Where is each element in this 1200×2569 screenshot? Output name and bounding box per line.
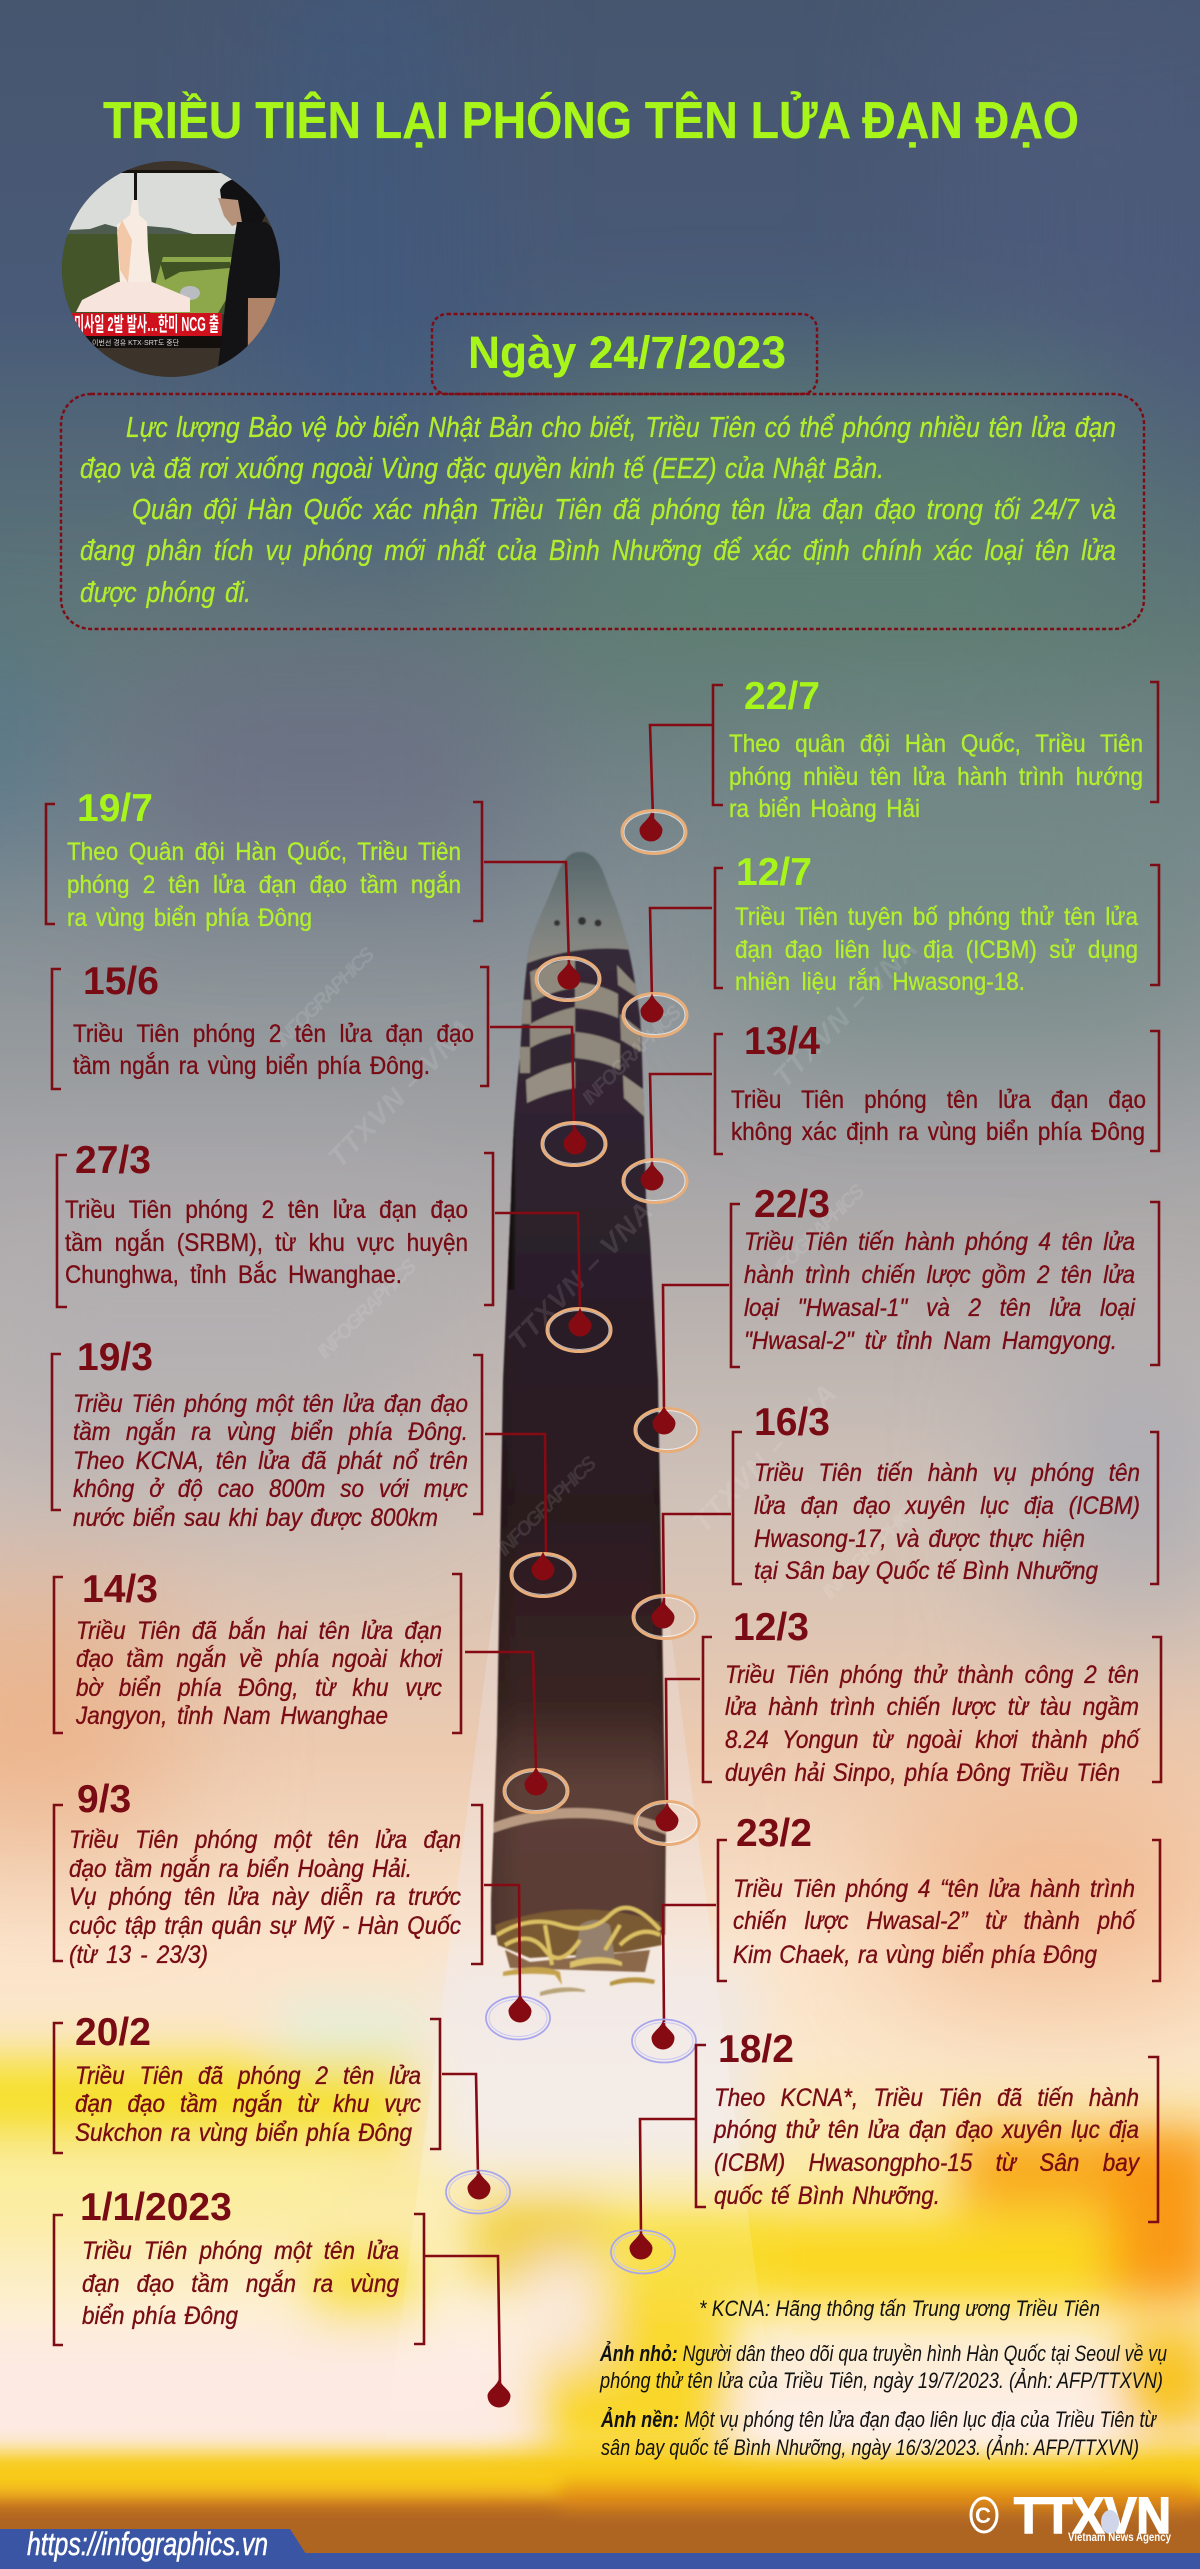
event: 12/7: đạn đạo liên lục địa (ICBM) sử dụng: [735, 936, 1138, 964]
event: 1/1/2023: [54, 2186, 510, 2408]
photo: people watching missile launch on TV: 미사일 2발 발사…한미 NCG 출: [74, 313, 219, 336]
event: 12/3: [635, 1606, 1161, 1844]
event: 18/2: phóng thử tên lửa đạn đạo xuyên lục địa: [714, 2116, 1139, 2144]
event: 12/7: 12/7: [736, 851, 812, 894]
watermarks: TTXVN – VNA: [767, 933, 923, 1093]
event: 9/3: [54, 1778, 550, 2040]
event: 14/3: [54, 1568, 568, 1812]
event: 19/3: tầm ngắn ra vùng biển phía Đông.: [73, 1418, 468, 1446]
event: 15/6: 15/6: [83, 960, 159, 1003]
intro text panel: Lực lượng Bảo vệ bờ biển Nhật Bản cho biết, Triều Tiên có thể phóng nhiều tên lửa đạn: [126, 412, 1116, 444]
event: 22/3: 22/3: [754, 1183, 830, 1226]
event: 16/3: Triều Tiên tiến hành vụ phóng tên: [754, 1459, 1140, 1487]
event: 19/7: [46, 787, 600, 1000]
event: 19/7: phóng 2 tên lửa đạn đạo tầm ngắn: [67, 871, 461, 899]
footer band with URL: https://infographics.vn: [27, 2526, 268, 2562]
event: 22/7: 22/7: [744, 675, 820, 718]
event: 20/2: Sukchon ra vùng biển phía Đông: [75, 2119, 412, 2147]
event: 20/2: đạn đạo tầm ngắn từ khu vực: [75, 2090, 421, 2118]
event: 18/2: quốc tế Bình Nhưỡng.: [714, 2182, 940, 2210]
watermarks: INFOGRAPHICS: [313, 1255, 422, 1364]
event: 18/2: 18/2: [718, 2028, 794, 2071]
event: 14/3: đạo tầm ngắn về phía ngoài khơi: [76, 1645, 442, 1673]
event: 22/3: loại "Hwasal-1" và 2 tên lửa loại: [744, 1294, 1135, 1322]
event: 15/6: [52, 960, 606, 1166]
event: 12/3: 12/3: [733, 1606, 809, 1649]
watermarks: INFOGRAPHICS: [271, 943, 380, 1052]
event: 22/7: phóng nhiều tên lửa hành trình hướng: [729, 763, 1143, 791]
event: 22/3: [635, 1183, 1159, 1452]
event: 14/3: Jangyon, tỉnh Nam Hwanghae: [76, 1702, 388, 1730]
event: 1/1/2023: biển phía Đông: [82, 2302, 238, 2330]
event: 23/2: chiến lược Hwasal-2” từ thành phố: [733, 1907, 1135, 1935]
event: 12/3: 8.24 Yongun từ ngoài khơi thành phố: [725, 1726, 1139, 1754]
event: 19/3: 19/3: [77, 1336, 153, 1379]
event: 22/7: Theo quân đội Hàn Quốc, Triều Tiên: [729, 730, 1143, 758]
event: 12/3: Triều Tiên phóng thử thành công 2 tên: [725, 1661, 1139, 1689]
event: 19/3: Theo KCNA, tên lửa đã phát nổ trên: [73, 1447, 468, 1475]
event: 27/3: Chunghwa, tỉnh Bắc Hwanghae.: [65, 1261, 402, 1289]
watermarks: [271, 933, 927, 1604]
note: KCNA: * KCNA: Hãng thông tấn Trung ương Triều Tiên: [699, 2296, 1100, 2321]
event: 13/4: 13/4: [744, 1020, 820, 1063]
event: 13/4: không xác định ra vùng biển phía Đông: [731, 1118, 1145, 1146]
event: 19/7: 19/7: [77, 787, 153, 830]
intro text panel: Quân đội Hàn Quốc xác nhận Triều Tiên đã phóng tên lửa đạn đạo trong tối 24/7 và: [132, 494, 1116, 526]
event: 27/3: tầm ngắn (SRBM), từ khu vực huyện: [65, 1229, 468, 1257]
watermarks: INFOGRAPHICS: [761, 1180, 870, 1289]
footer band with URL: [0, 2526, 1200, 2569]
watermarks: TTXVN – VNA: [322, 1013, 478, 1173]
event: 16/3: tại Sân bay Quốc tế Bình Nhưỡng: [754, 1557, 1098, 1585]
event: 9/3: đạo tầm ngắn ra biển Hoàng Hải.: [69, 1855, 412, 1883]
event: 23/2: Kim Chaek, ra vùng biển phía Đông: [733, 1941, 1097, 1969]
event: 23/2: [632, 1812, 1160, 2062]
event: 22/3: "Hwasal-2" từ tỉnh Nam Hamgyong.: [744, 1327, 1117, 1355]
photo: people watching missile launch on TV: 이번선 경유 KTX·SRT도 중단: [92, 338, 180, 347]
event: 22/7: [622, 675, 1158, 854]
intro text panel: [61, 394, 1144, 629]
event: 23/2: 23/2: [736, 1812, 812, 1855]
logo: TTXVN: Vietnam News Agency: [1068, 2532, 1172, 2544]
event: 16/3: 16/3: [754, 1401, 830, 1444]
event: 27/3: Triều Tiên phóng 2 tên lửa đạn đạo: [65, 1196, 468, 1224]
event: 16/3: [633, 1401, 1158, 1638]
event: 1/1/2023: Triều Tiên phóng một tên lửa: [82, 2237, 399, 2265]
date box: [432, 314, 817, 394]
event: 27/3: 27/3: [75, 1139, 151, 1182]
photo: people watching missile launch on TV: [60, 160, 285, 380]
event: 19/7: Theo Quân đội Hàn Quốc, Triều Tiên: [67, 838, 461, 866]
event: 9/3: (từ 13 - 23/3): [69, 1941, 208, 1969]
event: 19/3: nước biển sau khi bay được 800km: [73, 1504, 438, 1532]
intro text panel: được phóng đi.: [80, 577, 251, 609]
event: 20/2: 20/2: [75, 2011, 151, 2054]
event: 18/2: (ICBM) Hwasongpho-15 từ Sân bay: [714, 2149, 1139, 2177]
event: 1/1/2023: 1/1/2023: [80, 2186, 232, 2229]
caption: small photo: [599, 2341, 1167, 2393]
intro text panel: đang phân tích vụ phóng mới nhất của Bình Nhưỡng để xác định chính xác loại tên lửa: [80, 535, 1116, 567]
event: 16/3: lửa đạn đạo xuyên lục địa (ICBM): [754, 1492, 1140, 1520]
event: 19/3: không ở độ cao 800m so với mực: [73, 1475, 468, 1503]
event: 12/7: nhiên liệu rắn Hwasong-18.: [735, 968, 1025, 996]
rocket: [490, 852, 667, 1997]
watermarks: INFOGRAPHICS: [578, 1001, 687, 1110]
event: 16/3: Hwasong-17, và được thực hiện: [754, 1525, 1085, 1553]
event: 12/3: duyên hải Sinpo, phía Đông Triều Tiên: [725, 1759, 1120, 1787]
logo: TTXVN: C: [975, 2503, 991, 2528]
event: 13/4: Triều Tiên phóng tên lửa đạn đạo: [731, 1086, 1146, 1114]
event: 9/3: 9/3: [77, 1778, 131, 1821]
event: 20/2: Triều Tiên đã phóng 2 tên lửa: [75, 2062, 421, 2090]
event: 23/2: Triều Tiên phóng 4 “tên lửa hành trình: [733, 1875, 1135, 1903]
watermarks: TTXVN – VNA: [502, 1196, 658, 1356]
watermarks: INFOGRAPHICS: [493, 1452, 602, 1561]
event: 12/7: Triều Tiên tuyên bố phóng thử tên lửa: [735, 903, 1138, 931]
event: 14/3: bờ biển phía Đông, từ khu vực: [76, 1674, 442, 1702]
event: 15/6: Triều Tiên phóng 2 tên lửa đạn đạo: [73, 1020, 474, 1048]
light beam behind rocket: [385, 1400, 778, 2440]
title: TRIỀU TIÊN LẠI PHÓNG TÊN LỬA ĐẠN ĐẠO: [103, 91, 1079, 150]
event: 14/3: Triều Tiên đã bắn hai tên lửa đạn: [76, 1617, 442, 1645]
event: 27/3: [57, 1139, 611, 1352]
watermarks: TTXVN – VNA: [686, 1378, 842, 1538]
event: 19/7: ra vùng biển phía Đông: [67, 904, 312, 932]
event: 13/4: [623, 1020, 1159, 1202]
event: 9/3: Triều Tiên phóng một tên lửa đạn: [69, 1826, 461, 1854]
event: 19/3: [52, 1336, 575, 1596]
event: 14/3: 14/3: [82, 1568, 158, 1611]
event: 20/2: [54, 2011, 510, 2214]
logo: TTXVN: TTXVN: [1014, 2487, 1171, 2544]
event: 9/3: cuộc tập trận quân sự Mỹ - Hàn Quốc: [69, 1912, 461, 1940]
event: 22/3: hành trình chiến lược gồm 2 tên lửa: [744, 1261, 1135, 1289]
event: 18/2: Theo KCNA*, Triều Tiên đã tiến hành: [714, 2084, 1139, 2112]
event: 12/7: [623, 851, 1159, 1036]
event: 12/3: lửa hành trình chiến lược từ tàu ngầm: [725, 1693, 1139, 1721]
watermarks: INFOGRAPHICS: [818, 1495, 927, 1604]
event: 1/1/2023: đạn đạo tầm ngắn ra vùng: [82, 2270, 399, 2298]
event: 19/3: Triều Tiên phóng một tên lửa đạn đạo: [73, 1390, 468, 1418]
intro text panel: đạo và đã rơi xuống ngoài Vùng đặc quyền kinh tế (EEZ) của Nhật Bản.: [80, 453, 884, 485]
event: 9/3: Vụ phóng tên lửa này diễn ra trước: [69, 1883, 461, 1911]
caption: background photo: [600, 2407, 1158, 2460]
event: 22/7: ra biển Hoàng Hải: [729, 795, 920, 823]
event: 22/3: Triều Tiên tiến hành phóng 4 tên lửa: [744, 1228, 1135, 1256]
event: 18/2: [611, 2028, 1158, 2274]
date box: Ngày 24/7/2023: [468, 327, 786, 378]
event: 15/6: tầm ngắn ra vùng biển phía Đông.: [73, 1052, 430, 1080]
